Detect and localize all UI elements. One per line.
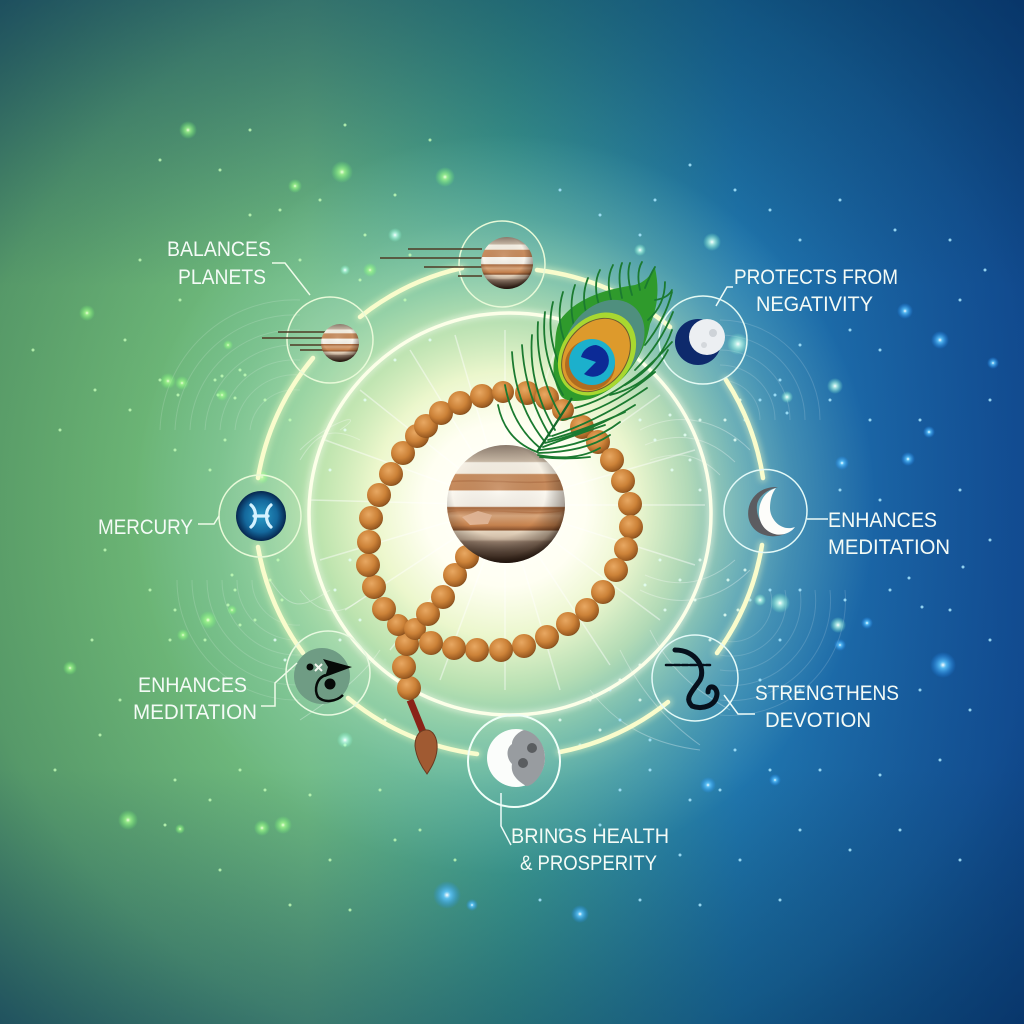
peacock feather bbox=[498, 262, 673, 458]
node: top planet with motion lines bbox=[380, 221, 545, 307]
feather barbs bbox=[498, 262, 673, 458]
label: enhances meditation left bbox=[133, 663, 297, 724]
label: brings health and prosperity: & PROSPERITY bbox=[520, 852, 657, 875]
glowing green sparks bbox=[63, 121, 455, 836]
beads bbox=[356, 381, 643, 700]
node: moon top right bbox=[659, 296, 747, 384]
node: squiggle symbol lower right bbox=[652, 635, 738, 721]
label: brings health and prosperity: BRINGS HEALTH bbox=[511, 825, 669, 848]
feather eye bbox=[547, 284, 661, 402]
glowing teal sparks bbox=[337, 228, 846, 748]
icon: banded planet bbox=[481, 237, 533, 289]
small stars, blue side bbox=[540, 165, 990, 905]
label: enhances meditation right bbox=[807, 509, 950, 559]
label: brings health and prosperity bbox=[501, 793, 669, 875]
small stars, green side bbox=[33, 125, 455, 910]
icon: motion lines bbox=[380, 249, 482, 276]
label: balances planets: PLANETS bbox=[178, 266, 266, 289]
node: moon bottom bbox=[468, 715, 560, 807]
node: left planet with motion lines bbox=[262, 297, 373, 383]
glowing blue sparks bbox=[433, 303, 999, 923]
node: Pisces icon left bbox=[219, 475, 301, 557]
icon: black serpent symbol bbox=[666, 650, 717, 708]
rudraksha mala bbox=[356, 381, 643, 774]
feather core bbox=[553, 268, 657, 401]
icon: blue disc with Pisces sign bbox=[236, 491, 286, 541]
label: strengthens devotion bbox=[724, 682, 899, 732]
label: protects from negativity: PROTECTS FROM bbox=[734, 266, 898, 289]
node: crescent right bbox=[724, 470, 807, 552]
label: mercury: MERCURY bbox=[98, 516, 193, 539]
label: protects from negativity: NEGATIVITY bbox=[756, 293, 873, 316]
label: protects from negativity bbox=[716, 266, 898, 316]
label: strengthens devotion: STRENGTHENS bbox=[755, 682, 899, 705]
label: balances planets bbox=[167, 238, 310, 295]
outer orbit ring bbox=[258, 268, 763, 754]
tassel bbox=[410, 700, 437, 774]
label: enhances meditation left: MEDITATION bbox=[133, 701, 257, 724]
icon: small banded planet bbox=[321, 324, 359, 362]
inner orbit ring bbox=[309, 313, 711, 715]
star field bbox=[33, 121, 999, 923]
label: enhances meditation left: ENHANCES bbox=[138, 674, 247, 697]
icon: navy disc with moon bbox=[675, 319, 721, 365]
node: symbol lower left bbox=[286, 631, 370, 715]
label: strengthens devotion: DEVOTION bbox=[765, 709, 871, 732]
label: enhances meditation right: ENHANCES bbox=[828, 509, 937, 532]
icon: cratered half moon bbox=[487, 729, 545, 787]
icon: grey-green disc with black symbol bbox=[294, 648, 350, 704]
label: balances planets: BALANCES bbox=[167, 238, 271, 261]
central Jupiter planet bbox=[447, 445, 565, 563]
icon: grey shadow and white crescent bbox=[748, 487, 785, 536]
icon: motion lines bbox=[262, 332, 325, 350]
label: enhances meditation right: MEDITATION bbox=[828, 536, 950, 559]
sunburst rays and filigree bbox=[160, 300, 845, 750]
inner ring sparkles bbox=[275, 340, 745, 730]
